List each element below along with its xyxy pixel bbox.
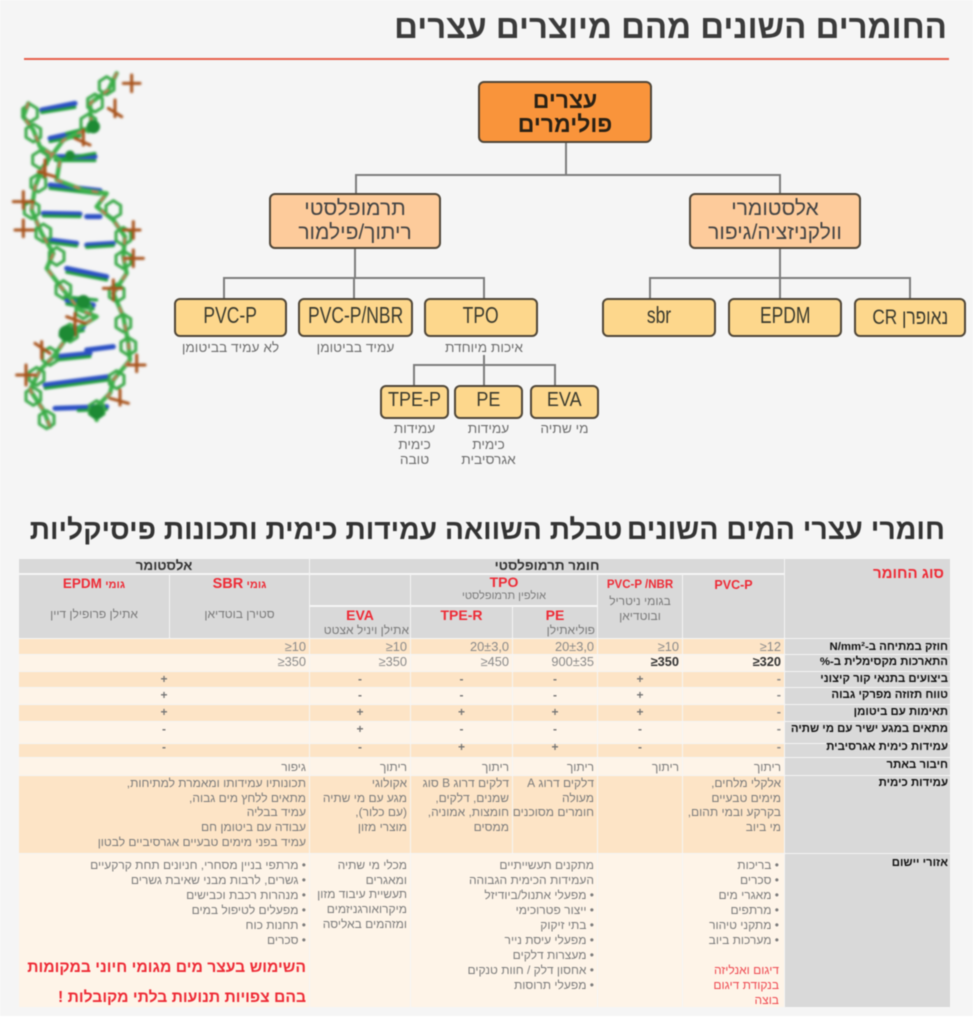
row: drinking water contact: - bbox=[638, 722, 642, 736]
row: application areas: • מפעלי תרוסות bbox=[514, 978, 594, 992]
box: PE: PE bbox=[476, 389, 501, 411]
header: blank above EVA bbox=[310, 575, 410, 605]
row: bitumen compatibility bbox=[18, 704, 950, 722]
row: application areas: • מפעלים לטיפול במים bbox=[192, 903, 306, 917]
comparison table bbox=[18, 558, 950, 1008]
row: application areas: • ייצור פטרוכימי bbox=[516, 903, 594, 917]
row: application areas: • מפעלי עיסת נייר bbox=[505, 933, 594, 947]
row: drinking water contact bbox=[19, 721, 950, 744]
header: TPE-R: TPE-R bbox=[440, 607, 482, 623]
row: application areas: • בריכות bbox=[737, 858, 779, 872]
box: SBR bbox=[602, 298, 716, 337]
row: cold performance: - bbox=[553, 672, 557, 686]
row: joint movement range bbox=[19, 687, 950, 704]
row: chemical resistance: ממסים bbox=[474, 820, 509, 834]
row: aggressive chemical resistance: - bbox=[358, 740, 362, 754]
box: SBR: sbr bbox=[647, 302, 671, 328]
header: PVC-P/NBR: בגומי ניטריל bbox=[609, 594, 671, 608]
header: TPO: TPO bbox=[490, 574, 518, 590]
row: application areas: • מפעלי אתנול/ביודיזל bbox=[484, 888, 594, 902]
note: PE bbox=[461, 421, 516, 467]
note: TPE-P: טובה bbox=[400, 452, 429, 467]
note: PVC-P: לא עמיד בביטומן bbox=[182, 340, 279, 355]
row: application areas: • מרתפים bbox=[731, 903, 779, 917]
header: material type bbox=[785, 559, 950, 638]
row: aggressive chemical resistance: + bbox=[458, 740, 465, 754]
header: PVC-P bbox=[683, 575, 784, 638]
row: application areas: בוצה bbox=[755, 993, 779, 1007]
box: PE bbox=[454, 385, 523, 419]
header: PVC-P/NBR: PVC-P /NBR bbox=[607, 579, 673, 591]
header: PVC-P/NBR: ובוטדיאן bbox=[619, 609, 661, 623]
note: PE: אגרסיבית bbox=[461, 452, 516, 467]
row: chemical resistance: אלקלי מלחים, bbox=[711, 776, 781, 790]
row: chemical resistance: שמנים, דלקים, bbox=[435, 791, 509, 805]
row: site joining: גיפור bbox=[281, 760, 306, 774]
row: cold performance: - bbox=[777, 671, 781, 686]
row: tensile strength: ≥10 bbox=[285, 639, 306, 654]
header: EPDM bbox=[19, 575, 169, 638]
row: application areas: דיגום ואנליזה bbox=[714, 963, 779, 977]
row: chemical resistance: מוצרי מזון bbox=[358, 820, 407, 834]
row: chemical resistance: מתאים ללחץ מים גבוה, bbox=[189, 791, 306, 805]
row: chemical resistance: מגע עם מי שתיה bbox=[323, 791, 407, 805]
root box: polymer membranes: עצרים bbox=[533, 87, 597, 113]
row: application areas: אזורי יישום bbox=[892, 857, 948, 869]
callout: use of rubber membrane bbox=[26, 959, 306, 1006]
row: application areas: תעשיית עיבוד מזון bbox=[317, 887, 407, 901]
row: bitumen compatibility: + bbox=[636, 705, 644, 719]
box: TPE-P: TPE-P bbox=[388, 389, 441, 411]
row: maximum elongation: ≥350 bbox=[379, 654, 407, 669]
row: bitumen compatibility: + bbox=[356, 705, 364, 719]
header: thermoplastic group: חומר תרמופלסטי bbox=[495, 558, 599, 573]
row: drinking water contact: - bbox=[162, 722, 166, 736]
row: cold performance: + bbox=[636, 672, 644, 686]
row: chemical resistance: מעולה bbox=[562, 791, 594, 805]
row: chemical resistance: דלקים דרוג B סוג bbox=[423, 776, 509, 790]
header: elastomer group: אלסטומר bbox=[136, 558, 192, 573]
box: TPO: TPO bbox=[463, 302, 499, 328]
callout: use of rubber membrane: השימוש בעצר מים מגומי חיוני במקומות bbox=[27, 959, 306, 976]
row: aggressive chemical resistance: - bbox=[777, 739, 781, 754]
note: PE: עמידות bbox=[468, 421, 509, 436]
header: EVA bbox=[310, 607, 410, 638]
row: site joining bbox=[19, 758, 950, 776]
row: aggressive chemical resistance: - bbox=[638, 740, 642, 754]
row: joint movement range: - bbox=[460, 688, 464, 702]
row: chemical resistance: עבודה עם ביטומן חם bbox=[201, 820, 306, 834]
note: TPE-P: כימית bbox=[398, 436, 431, 452]
row: chemical resistance: חומרים מסוכנים bbox=[513, 805, 594, 819]
row: tensile strength: 20±3,0 bbox=[555, 639, 594, 654]
row: application areas: ומזהמים באליסה bbox=[323, 917, 407, 931]
row: joint movement range: - bbox=[777, 687, 781, 702]
row: cold performance: - bbox=[460, 672, 464, 686]
row: application areas: • תחנות כוח bbox=[246, 918, 306, 932]
box: EPDM bbox=[728, 298, 842, 337]
header: elastomer group bbox=[19, 559, 309, 573]
row: chemical resistance: תכונותיו עמידותו ומאמרת למתיחות, bbox=[127, 776, 306, 790]
row: tensile strength: חוזק במתיחה ב-N/mm² bbox=[829, 641, 948, 653]
box: neoprene CR bbox=[854, 298, 966, 337]
row: chemical resistance: דלקים דרוג A bbox=[527, 776, 594, 790]
row: cold performance: + bbox=[160, 672, 168, 686]
row: chemical resistance: חומצות, אמוניה, bbox=[428, 805, 509, 819]
box: EVA bbox=[530, 385, 599, 419]
row: drinking water contact: מתאים במגע ישיר עם מי שתיה bbox=[791, 723, 948, 735]
row: tensile strength: ≥10 bbox=[386, 639, 407, 654]
row: application areas: • סכרים bbox=[267, 933, 306, 947]
row: joint movement range: + bbox=[160, 688, 168, 702]
tree connectors bbox=[222, 142, 912, 386]
row: site joining: ריתוך bbox=[567, 760, 594, 774]
row: application areas: • גשרים, לרבות מבני שאיבת גשרים bbox=[131, 873, 306, 887]
box: EPDM: EPDM bbox=[760, 302, 810, 328]
row: maximum elongation: ≥320 bbox=[753, 654, 781, 669]
row: application areas: • מאגרי מים bbox=[718, 888, 779, 902]
row: tensile strength: ≥10 bbox=[658, 639, 679, 654]
note: TPE-P: עמידות bbox=[394, 421, 435, 436]
row: chemical resistance: עמיד בבליה bbox=[247, 805, 306, 819]
box: PVC-P/NBR bbox=[298, 298, 413, 337]
row: application areas: • מנהרות רכבת וכבישים bbox=[186, 888, 306, 902]
root box: polymer membranes bbox=[478, 81, 652, 143]
note: EVA: מי שתיה bbox=[540, 421, 589, 436]
row: application areas: • בתי זיקוק bbox=[540, 918, 594, 932]
row: site joining: ריתוך bbox=[652, 760, 679, 774]
row: chemical resistance: בקרקע ובמי תהום, bbox=[688, 805, 781, 819]
row: maximum elongation: התארכות מקסימלית ב-% bbox=[820, 656, 948, 668]
note: PVC-P/NBR: עמיד בביטומן bbox=[317, 340, 394, 355]
box: thermoplastic: ריתוך/פילמור bbox=[298, 221, 412, 244]
row: bitumen compatibility: + bbox=[458, 705, 465, 719]
row: site joining: חיבור באתר bbox=[887, 759, 948, 771]
note: TPO: איכות מיוחדת bbox=[445, 340, 523, 355]
row: application areas: • מערכות ביוב bbox=[709, 933, 779, 947]
box: TPO bbox=[424, 298, 538, 337]
note: PE: כימית bbox=[472, 436, 505, 452]
row: application areas: • מרתפי בניין מסחרי, חניונים תחת קרקעיים bbox=[90, 858, 306, 872]
box: elastomeric bbox=[689, 193, 861, 249]
row: cold performance bbox=[18, 671, 950, 688]
row: chemical resistance: עמידות כימית bbox=[879, 777, 948, 789]
row: application areas: ומאגרים bbox=[366, 873, 407, 887]
row: cold performance: - bbox=[358, 672, 362, 686]
header: EPDM: גומי EPDM bbox=[63, 576, 125, 591]
row: aggressive chemical resistance bbox=[18, 739, 950, 758]
row: application areas: • אחסון דלק / חוות טנקים bbox=[468, 963, 594, 977]
box: PVC-P: PVC-P bbox=[204, 302, 257, 328]
row: maximum elongation: ≥350 bbox=[278, 654, 306, 669]
box: elastomeric: וולקניזציה/גיפור bbox=[708, 221, 842, 244]
row: joint movement range: + bbox=[636, 688, 644, 702]
header: SBR bbox=[170, 575, 309, 638]
header: EVA: EVA bbox=[346, 607, 374, 623]
icon: DNA double helix bbox=[10, 70, 148, 432]
row: aggressive chemical resistance: עמידות כימית אגרסיבית bbox=[826, 741, 948, 753]
header: TPO bbox=[411, 575, 597, 605]
table heading: חומרי עצרי המים השונים טבלת השוואה עמידות כימית ותכונות פיסיקליות bbox=[30, 513, 945, 546]
header: SBR: גומי SBR bbox=[213, 576, 266, 592]
header: TPO: אולפין תרמופלסטי bbox=[462, 590, 546, 602]
row: chemical resistance: (עם כלור), bbox=[355, 805, 407, 819]
box: elastomeric: אלסטומרי bbox=[731, 197, 819, 220]
header: TPE-R bbox=[411, 607, 512, 638]
row: joint movement range: - bbox=[553, 688, 557, 702]
box: neoprene CR: נאופרן CR bbox=[872, 306, 948, 328]
header: EPDM: אתילן פרופילן דיין bbox=[50, 607, 138, 621]
box: PVC-P bbox=[174, 298, 287, 337]
box: thermoplastic bbox=[269, 193, 441, 249]
header: PE: פוליאתילן bbox=[547, 623, 595, 637]
row: tensile strength: ≥12 bbox=[760, 639, 781, 654]
row: application areas: • סכרים bbox=[740, 873, 779, 887]
row: chemical resistance: מי ביוב bbox=[746, 820, 781, 834]
row: chemical resistance: עמיד בפני מימים טבעיים אגרסיביים לבטון bbox=[98, 835, 306, 849]
row: application areas: • מעצרות דלקים bbox=[513, 948, 594, 962]
box: thermoplastic: תרמופלסטי bbox=[304, 197, 406, 220]
row: joint movement range: טווח תזוזה מפרקי גבוה bbox=[831, 689, 948, 701]
row: joint movement range: - bbox=[358, 688, 362, 702]
header: PVC-P/NBR bbox=[598, 575, 682, 638]
row: tensile strength: 20±3,0 bbox=[470, 639, 509, 654]
header: PE bbox=[513, 607, 597, 638]
box: EVA: EVA bbox=[547, 389, 582, 411]
row: application areas: העמידות הכימית הגבוהה bbox=[469, 873, 594, 887]
header: thermoplastic group bbox=[310, 559, 784, 573]
row: application areas: מיקרואורגניזמים bbox=[327, 902, 407, 916]
row: drinking water contact: - bbox=[553, 722, 557, 736]
header: PE: PE bbox=[546, 607, 564, 623]
box: TPE-P bbox=[380, 385, 449, 419]
row: aggressive chemical resistance: - bbox=[162, 740, 166, 754]
note: TPE-P bbox=[394, 421, 436, 467]
row: bitumen compatibility: תאימות עם ביטומן bbox=[854, 706, 948, 718]
row: maximum elongation bbox=[19, 654, 950, 672]
row: chemical resistance: אקולוגי bbox=[372, 776, 407, 790]
row: maximum elongation: ≥350 bbox=[651, 654, 679, 669]
row: maximum elongation: ≥450 bbox=[481, 654, 509, 669]
row: application areas: מתקנים תעשייתיים bbox=[499, 858, 594, 872]
row: bitumen compatibility: - bbox=[777, 704, 781, 719]
row: chemical resistance: מימים טבעיים bbox=[711, 791, 781, 805]
header: EVA: אתילן ויניל אצטט bbox=[324, 623, 409, 637]
header: material type: סוג החומר bbox=[873, 565, 944, 582]
row: application areas: מכלי מי שתיה bbox=[338, 858, 407, 872]
row: bitumen compatibility: + bbox=[160, 705, 168, 719]
row: site joining: ריתוך bbox=[482, 760, 509, 774]
root box: polymer membranes: פולימרים bbox=[518, 111, 612, 137]
header: SBR: סטירן בוטדיאן bbox=[204, 607, 275, 621]
row: bitumen compatibility: + bbox=[551, 705, 558, 719]
row: application areas bbox=[19, 854, 950, 1008]
row: drinking water contact: - bbox=[460, 722, 464, 736]
row: drinking water contact: + bbox=[356, 722, 364, 736]
title: החומרים השונים מהם מיוצרים עצרים bbox=[394, 8, 947, 45]
header: PVC-P: PVC-P bbox=[714, 578, 753, 592]
title underline bbox=[24, 58, 949, 60]
row: maximum elongation: 900±35 bbox=[551, 654, 594, 669]
callout: use of rubber membrane: בהם צפויות תנועות בלתי מקובלות ! bbox=[58, 989, 306, 1006]
row: drinking water contact: - bbox=[777, 721, 781, 736]
row: site joining: ריתוך bbox=[380, 760, 407, 774]
row: aggressive chemical resistance: + bbox=[551, 740, 558, 754]
row: cold performance: ביצועים בתנאי קור קיצוני bbox=[820, 673, 948, 685]
row: application areas: בנקודת דיגום bbox=[713, 978, 779, 992]
row: application areas: • מתקני טיהור bbox=[709, 918, 779, 932]
row: chemical resistance bbox=[18, 776, 950, 854]
row: site joining: ריתוך bbox=[754, 760, 781, 774]
row: tensile strength bbox=[18, 638, 950, 654]
box: PVC-P/NBR: PVC-P/NBR bbox=[308, 302, 403, 328]
